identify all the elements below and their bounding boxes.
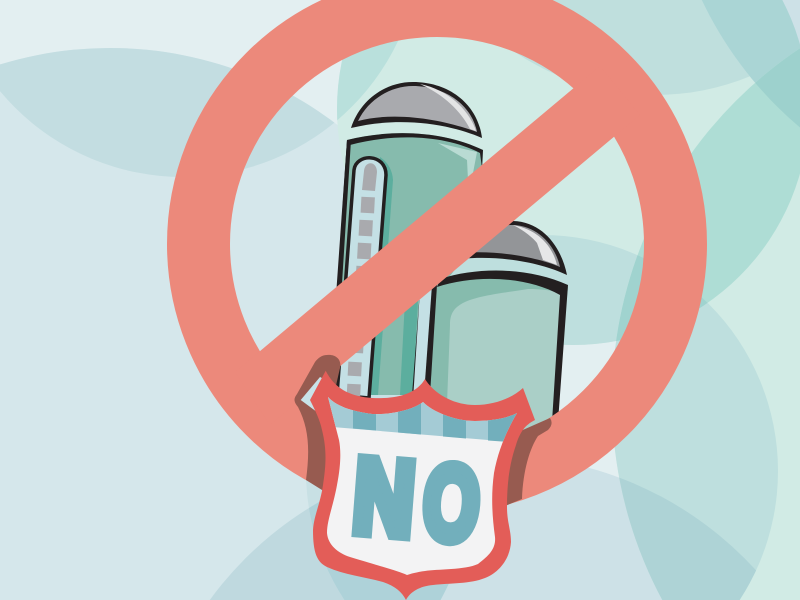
NO lettering [349,437,484,565]
icon: short silo [413,221,568,435]
short silo dome [440,221,567,275]
icon: prohibition ring [198,6,676,482]
short silo gap strip [413,285,440,400]
silo ladder [337,158,386,398]
NO lettering: N [349,437,419,559]
icon: tall silo [329,82,483,398]
NO lettering: O [419,444,484,565]
shield inner white panel [327,397,517,575]
short silo body [424,271,568,435]
shield red border [310,371,535,600]
shield badge [310,371,535,600]
silo dome [351,82,482,138]
prohibition diagonal bar [235,66,640,425]
silo body [329,133,483,395]
shield stripes [328,397,517,442]
shield shadow [294,355,552,508]
